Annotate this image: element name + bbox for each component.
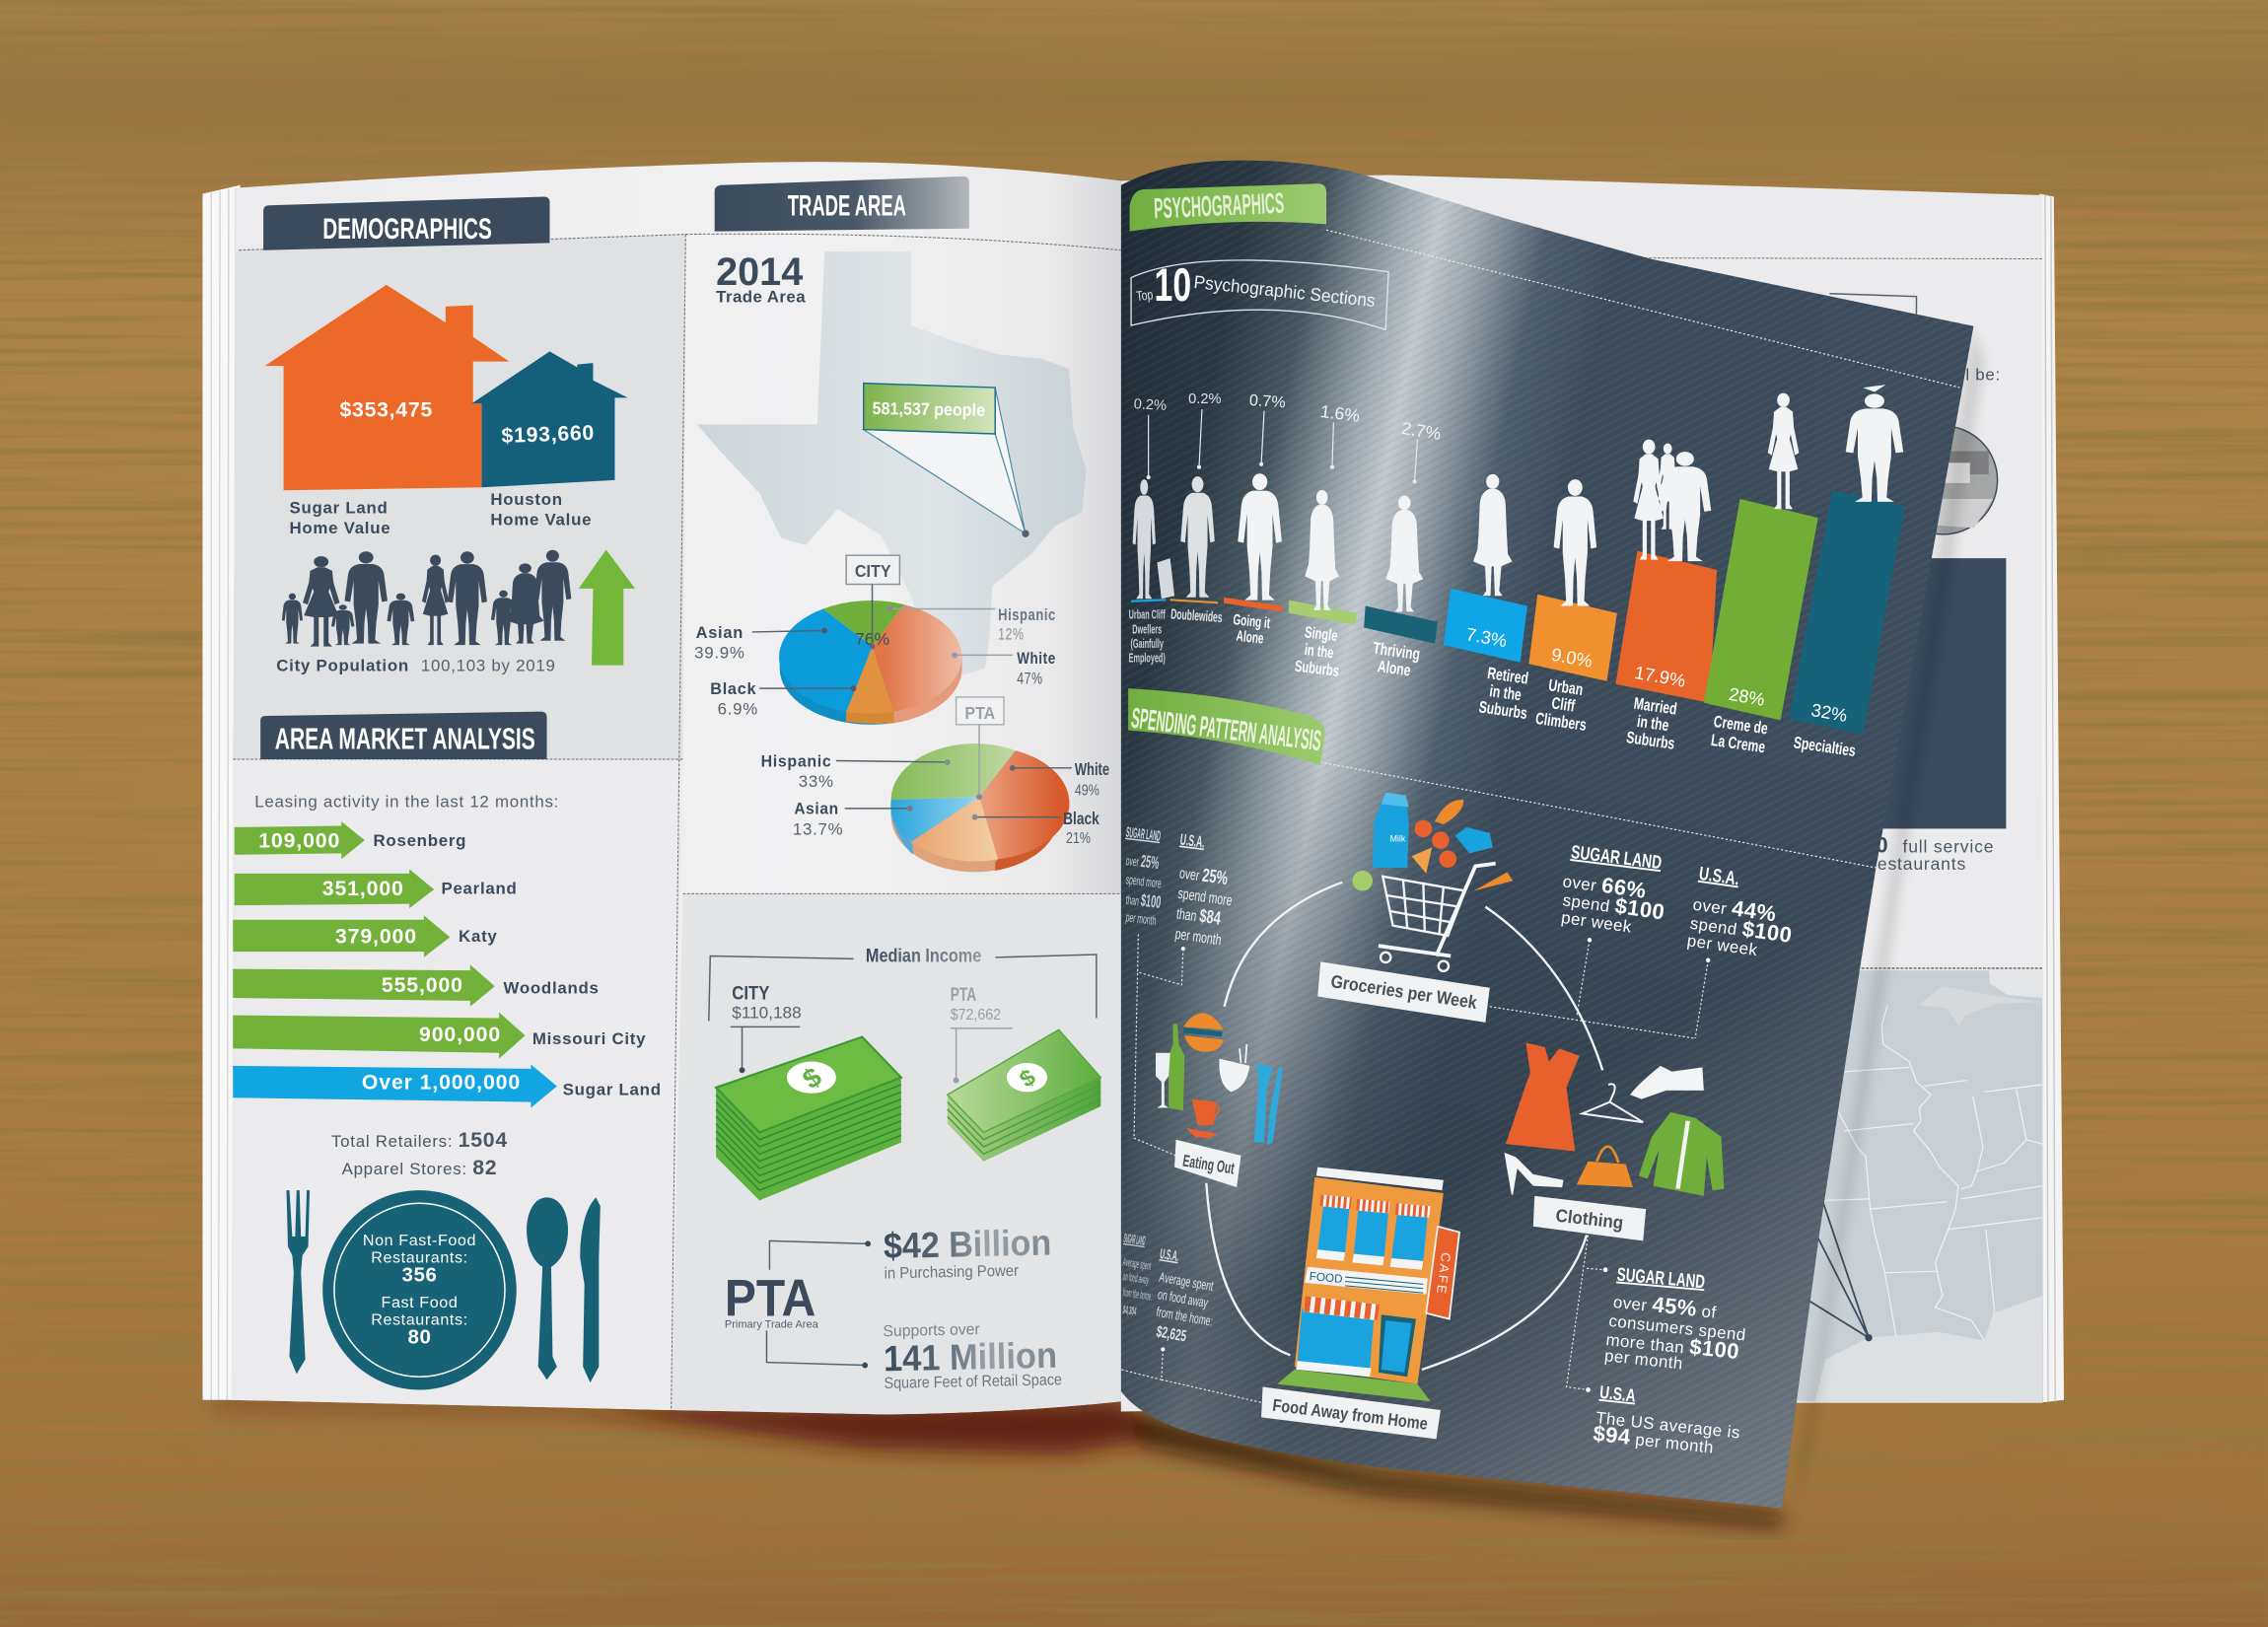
chart: city pie: 76% [855, 629, 889, 649]
callout: clothing statistics: per month [1603, 1346, 1684, 1373]
retail totals [331, 1128, 508, 1179]
label: food away from home: Food Away from Home [1271, 1395, 1429, 1434]
bar percentages: 9.0% [1550, 644, 1594, 672]
callout: food away statistics: $4,304 [1122, 1303, 1137, 1317]
city pie tag and leaders [752, 555, 1013, 691]
callout: eating out statistics: over 25% [1178, 862, 1230, 889]
callout: eating out statistics: than $84 [1175, 902, 1222, 929]
segment labels: Climbers [1534, 710, 1588, 736]
segment labels: Specialties [1793, 735, 1857, 761]
callout: clothing statistics: consumers spend [1608, 1311, 1747, 1345]
shopping cart [1379, 864, 1496, 971]
small percentages and leader lines [1133, 391, 1443, 483]
segment labels: (Gainfully [1130, 637, 1164, 652]
restaurant photo circle [1889, 426, 1998, 534]
segment labels: Retired [1486, 665, 1529, 688]
city median income [731, 983, 802, 1073]
stat: retail space: 141 Million [884, 1335, 1057, 1379]
callout: food away statistics: from the home: [1122, 1286, 1153, 1303]
median income heading and brackets [709, 946, 1097, 1021]
panel: turned psychographics page: SPENDING PATTERN ANALYSIS [1129, 702, 1323, 757]
icon: blue house [471, 351, 628, 487]
shadow beneath open book [210, 1397, 1782, 1527]
callout: food away statistics: from the home: [1155, 1306, 1214, 1329]
pta pie labels [761, 751, 1109, 847]
bars [1131, 490, 1905, 735]
city pie labels: Hispanic [998, 605, 1056, 624]
segment labels: Alone [1377, 658, 1412, 680]
callout: groceries statistics: over 44% [1691, 890, 1778, 926]
segment labels: Doublewides [1170, 605, 1223, 626]
partial text: full service restaurants: full service [1903, 837, 1994, 857]
pta pie labels: 13.7% [793, 819, 843, 838]
arrow: rosenberg [235, 821, 466, 859]
plate with restaurant counts: 80 [407, 1326, 431, 1349]
callout: eating out statistics: than $100 [1125, 887, 1163, 912]
segment labels: Married [1633, 695, 1678, 719]
segment labels: Creme de [1713, 713, 1769, 739]
panel: demographics background [233, 235, 685, 759]
arrow: woodlands: 555,000 [382, 973, 463, 997]
bracket on hidden page [1829, 294, 1916, 316]
plate with restaurant counts: Non Fast-Food [363, 1232, 476, 1249]
callout: clothing statistics: U.S.A [1598, 1381, 1637, 1406]
icon: green growth arrow [579, 549, 635, 666]
heading tab: demographics [263, 196, 549, 250]
segment labels: Going it [1233, 610, 1272, 632]
burger [1183, 1013, 1224, 1052]
bar percentages: 7.3% [1464, 623, 1509, 651]
segment labels: Suburbs [1477, 699, 1528, 724]
label: clothing [1533, 1196, 1646, 1240]
right back page [1121, 175, 2042, 1411]
icon: family silhouettes [282, 550, 571, 647]
icon: restaurant building: FOOD [1309, 1270, 1343, 1286]
segment labels: La Creme [1710, 732, 1766, 757]
icon: small money stack: $ [1015, 1064, 1040, 1093]
small percentages and leader lines: 0.2% [1188, 391, 1222, 407]
callout: groceries statistics: per week [1560, 908, 1633, 937]
milk carton [1373, 793, 1409, 868]
city median income: $110,188 [732, 1004, 802, 1023]
city pie labels: Asian [696, 623, 744, 642]
callout: 581,537 people: 581,537 people [872, 398, 985, 420]
callout: groceries statistics: SUGAR LAND [1570, 842, 1663, 874]
arrow: rosenberg: Rosenberg [374, 831, 466, 850]
pta pie labels: Black [1063, 809, 1099, 828]
arrow: woodlands [233, 964, 600, 1007]
high heel [1504, 1153, 1564, 1194]
callout: food away statistics: U.S.A. [1159, 1246, 1179, 1265]
stat: purchasing power: in Purchasing Power [884, 1262, 1020, 1283]
houston home value: $193,660 [501, 421, 595, 448]
heading tab: psychographics: PSYCHOGRAPHICS [1153, 187, 1285, 225]
sugar land label: Home Value [289, 519, 390, 537]
pta pie labels: White [1075, 759, 1109, 779]
segment labels: Thriving [1372, 640, 1421, 665]
pta pie tag and leaders [836, 697, 1072, 820]
blue cutlery [1254, 1063, 1283, 1146]
arrow: pearland: Pearland [441, 879, 518, 897]
icon: fork [287, 1190, 310, 1374]
arrow: pearland [235, 869, 518, 908]
left page sheet [232, 162, 1121, 1414]
callout: food away statistics: on food away [1122, 1270, 1150, 1287]
arrow: sugar land: Over 1,000,000 [362, 1070, 521, 1094]
door [1379, 1314, 1416, 1377]
bar percentages [1464, 623, 1849, 726]
shoe [1630, 1066, 1704, 1099]
callout: eating out statistics: per month [1174, 925, 1223, 949]
city population: 100,103 by 2019 [421, 657, 556, 675]
label: eating out [1174, 1140, 1241, 1187]
callout: groceries statistics [1560, 842, 1794, 1038]
hanger [1583, 1084, 1643, 1122]
callout: food away statistics: $2,625 [1155, 1322, 1188, 1345]
leasing intro text: Leasing activity in the last 12 months: [254, 792, 559, 811]
upper windows [1317, 1205, 1428, 1261]
small percentages and leader lines: 0.2% [1133, 396, 1167, 414]
pta median income [951, 985, 1013, 1084]
callout: 581,537 people [864, 384, 1029, 537]
coffee cup [1186, 1099, 1219, 1138]
dotted section rules [1320, 230, 1959, 1038]
callout: food away statistics: Average spent [1122, 1255, 1152, 1272]
icon: knife [580, 1197, 601, 1382]
stat: retail space: Square Feet of Retail Space [884, 1371, 1062, 1392]
heading tab: area market analysis: AREA MARKET ANALYSIS [275, 722, 535, 756]
city pie labels [694, 605, 1056, 719]
icon: orange house [265, 285, 509, 490]
icon: restaurant building [1277, 1167, 1459, 1401]
wine glass [1156, 1053, 1170, 1107]
arrow: sugar land: Sugar Land [563, 1080, 662, 1098]
arrow: katy [233, 915, 498, 957]
houston label: Home Value [490, 510, 592, 529]
arrow: missouri city: 900,000 [419, 1023, 501, 1046]
segment labels: Employed) [1129, 652, 1166, 666]
pta median income: $72,662 [951, 1006, 1001, 1024]
lower storefront [1298, 1309, 1374, 1370]
label: eating out: Eating Out [1181, 1152, 1236, 1178]
partial text: full service restaurants [1876, 833, 1994, 874]
partial text: will be: ll be: [1961, 366, 2001, 385]
sugar land home value: $353,475 [339, 397, 433, 421]
median income heading and brackets: Median Income [866, 946, 981, 966]
pta connectors [766, 1240, 871, 1368]
callout: clothing statistics: SUGAR LAND [1616, 1265, 1706, 1293]
callout: groceries statistics: U.S.A. [1698, 864, 1740, 889]
panel: demographics home values [265, 285, 628, 537]
arrow: katy: Katy [459, 927, 498, 946]
bar percentages: 17.9% [1633, 662, 1687, 691]
chart: city pie [779, 601, 961, 725]
partial text: full service restaurants: estaurants [1878, 854, 1966, 874]
callout: clothing statistics: The US average is [1595, 1408, 1741, 1443]
label: groceries per week [1317, 961, 1490, 1023]
panel: turned psychographics page [1120, 160, 1974, 1509]
trade area title: 2014 [716, 250, 803, 294]
segment labels: in the [1636, 713, 1669, 736]
stat: retail space [883, 1318, 1062, 1392]
cafe sign [1426, 1227, 1459, 1319]
wine bottle [1169, 1024, 1184, 1110]
top 10 box: Top [1136, 287, 1154, 304]
pta title: PTA [725, 1270, 815, 1328]
chart: psychographic segments [1129, 385, 1905, 761]
handbag [1577, 1147, 1633, 1187]
trade area title: Trade Area [716, 288, 806, 307]
navy panel [1837, 558, 2006, 828]
heading tab: trade area: TRADE AREA [788, 190, 906, 223]
top 10 box: Psychographic Sections [1193, 271, 1377, 311]
callout: eating out statistics [1125, 825, 1234, 1156]
pta title: Primary Trade Area [725, 1318, 819, 1330]
pta pie labels: Hispanic [761, 751, 831, 770]
city pie labels: 47% [1017, 670, 1043, 688]
callout: eating out statistics: over 25% [1125, 849, 1161, 873]
green base [1277, 1370, 1431, 1401]
callout: groceries statistics: spend $100 [1689, 909, 1794, 948]
bar percentages: 32% [1809, 699, 1849, 726]
segment labels: in the [1488, 682, 1523, 705]
page edge stack left [202, 185, 241, 1400]
small percentages and leader lines: 2.7% [1400, 418, 1443, 444]
callout: groceries statistics: per week [1686, 931, 1759, 959]
retail totals: Apparel Stores: 82 [342, 1156, 497, 1179]
arrow: pearland: 351,000 [322, 877, 404, 900]
plate with restaurant counts [322, 1190, 517, 1389]
city pie labels: Black [710, 679, 756, 698]
icon: spoon [527, 1197, 568, 1379]
arrow: missouri city: Missouri City [532, 1029, 646, 1048]
heading tab: spending pattern analysis [1128, 688, 1325, 765]
icon: clothing set [1504, 1042, 1724, 1196]
stat: retail space: Supports over [883, 1320, 980, 1340]
city median income: CITY [732, 983, 770, 1004]
callout: clothing statistics [1567, 1236, 1747, 1458]
milk carton: Milk [1390, 834, 1406, 844]
segment labels: Alone [1236, 627, 1264, 647]
callout: clothing statistics: more than $100 [1605, 1325, 1740, 1364]
stat: purchasing power: $42 Billion [884, 1222, 1052, 1266]
callout: clothing statistics: over 45% of [1612, 1288, 1718, 1323]
callout: food away statistics: SUGAR LAND [1123, 1231, 1147, 1248]
callout: eating out statistics: spend more [1125, 873, 1163, 891]
pta pie labels: 49% [1075, 782, 1099, 800]
city population: City Population [276, 657, 409, 675]
dashed section rules [233, 234, 1121, 1410]
pta median income: PTA [951, 985, 976, 1006]
shadow cast by turned page [1794, 326, 1984, 1509]
small percentages and leader lines: 0.7% [1248, 391, 1286, 411]
plate with restaurant counts: Restaurants: [371, 1310, 468, 1328]
segment labels [1129, 605, 1857, 761]
bowl [1219, 1044, 1249, 1092]
bar percentages: 28% [1728, 683, 1766, 710]
stat: purchasing power [884, 1222, 1052, 1283]
dress [1506, 1042, 1580, 1151]
city pie labels: 39.9% [694, 643, 745, 662]
circular spending diagram arcs [1206, 883, 1602, 1370]
top 10 box: 10 [1155, 259, 1191, 311]
label: groceries per week: Groceries per Week [1329, 970, 1479, 1013]
heading tab: psychographics [1130, 183, 1326, 232]
heading tab: trade area [715, 177, 969, 232]
segment labels: Suburbs [1294, 656, 1340, 679]
top 10 box [1131, 259, 1388, 329]
US map [1797, 970, 2043, 1402]
map: texas silhouette [697, 251, 1087, 679]
plate with restaurant counts: Fast Food [382, 1294, 458, 1311]
pta pie labels: 33% [799, 772, 834, 791]
small percentages and leader lines: 1.6% [1319, 401, 1361, 426]
city pie labels: 12% [998, 624, 1025, 643]
segment labels: Urban [1547, 676, 1584, 700]
panel: area market background [232, 759, 682, 1410]
heading tab: area market analysis [260, 712, 547, 759]
arrow: sugar land [233, 1064, 662, 1107]
callout: groceries statistics: spend $100 [1561, 885, 1666, 925]
city pie labels: White [1017, 649, 1056, 668]
icon: large money stack: $ [797, 1061, 827, 1095]
partial text: full service restaurants: 0 [1876, 833, 1888, 858]
pta pie labels: Asian [794, 800, 839, 818]
callout: eating out statistics: per month [1125, 910, 1157, 929]
food band [1305, 1267, 1428, 1295]
arrow: katy: 379,000 [335, 924, 417, 948]
produce [1352, 800, 1513, 890]
segment labels: Single [1304, 622, 1339, 645]
segment labels: Urban Cliff [1129, 608, 1166, 622]
page edge stack right [2039, 194, 2064, 1403]
arrow: missouri city [233, 1013, 646, 1059]
callout: food away statistics: on food away [1157, 1288, 1209, 1311]
cafe sign: CAFE [1434, 1251, 1453, 1297]
icon: small money stack [948, 1029, 1100, 1162]
jacket [1639, 1112, 1724, 1196]
segment labels: Suburbs [1625, 729, 1675, 753]
sugar land label: Sugar Land [289, 499, 389, 518]
icon: groceries cart [1352, 793, 1513, 971]
city population [276, 657, 556, 675]
segment labels: in the [1304, 640, 1335, 662]
arrow: rosenberg: 109,000 [258, 828, 340, 852]
icon: eating out set [1156, 1013, 1283, 1146]
city pie labels: 6.9% [718, 700, 758, 719]
segment labels: Cliff [1550, 695, 1576, 716]
pta pie tag and leaders: PTA [964, 703, 995, 723]
callout: food away statistics: Average spent [1158, 1271, 1215, 1295]
pta pie labels: 21% [1066, 829, 1091, 847]
callout: eating out statistics: U.S.A. [1179, 831, 1206, 851]
segment labels: Dwellers [1132, 622, 1162, 637]
callout: groceries statistics: over 66% [1561, 867, 1648, 903]
plate with restaurant counts: Restaurants: [371, 1248, 468, 1266]
silhouettes [1133, 385, 1903, 611]
arrow: woodlands: Woodlands [504, 979, 600, 998]
panel: median income background [672, 893, 1121, 1414]
icon: large money stack [716, 1037, 901, 1200]
callout: eating out statistics: SUGAR LAND [1125, 825, 1162, 845]
label: clothing: Clothing [1555, 1205, 1624, 1233]
chart: pta pie [890, 743, 1069, 872]
houston label: Houston [490, 490, 563, 509]
callout: food away statistics [1121, 1231, 1263, 1403]
chart: leasing arrows [233, 821, 662, 1107]
callout: eating out statistics: spend more [1177, 884, 1234, 909]
city pie tag and leaders: CITY [855, 561, 891, 581]
callout: clothing statistics: $94 per month [1592, 1421, 1715, 1458]
retail totals: Total Retailers: 1504 [331, 1128, 508, 1152]
heading tab: demographics: DEMOGRAPHICS [322, 213, 492, 246]
plate with restaurant counts: 356 [401, 1263, 437, 1286]
